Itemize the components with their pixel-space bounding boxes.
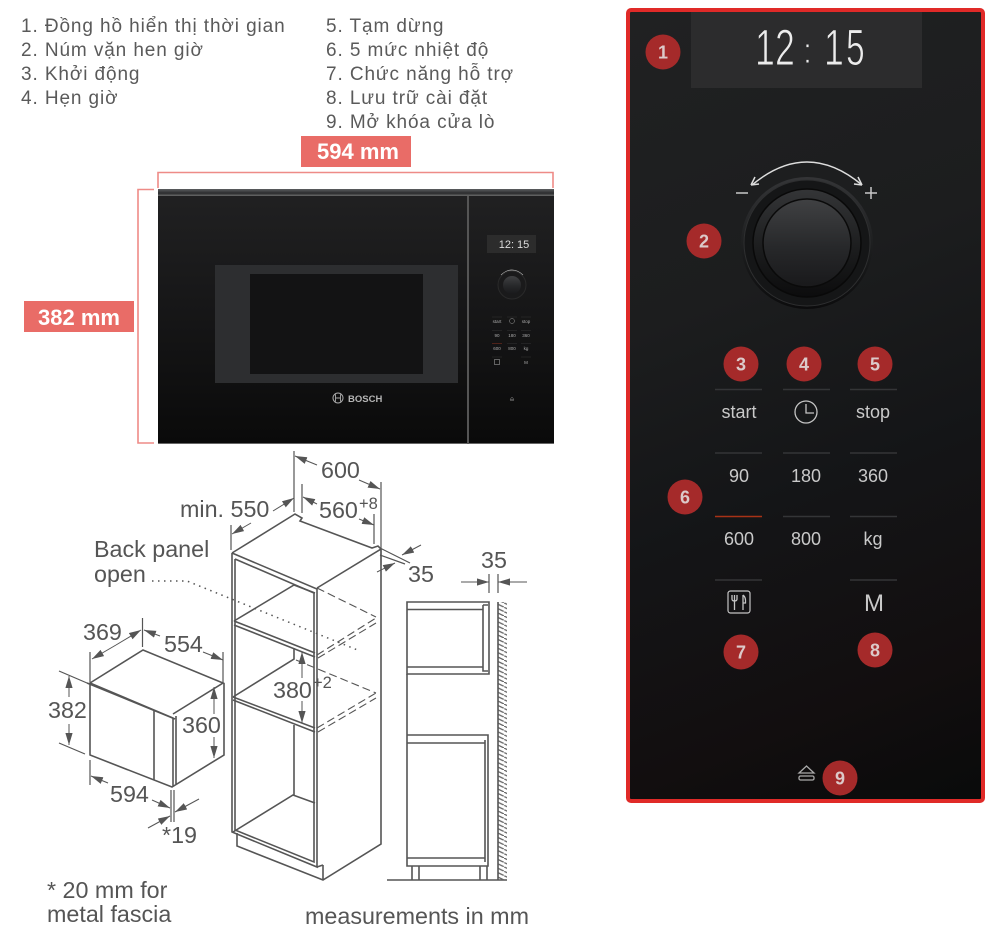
dimension 380 +2 xyxy=(273,652,332,723)
legend: functions 5 to 9: 5. Tạm dừng xyxy=(326,16,444,37)
height bracket xyxy=(138,190,154,443)
number marker 5: 5 xyxy=(870,354,880,374)
diagram: cabinet isometric xyxy=(180,451,434,880)
width bracket xyxy=(158,172,553,188)
button: 90: 90 xyxy=(729,466,749,486)
button: 180: 180 xyxy=(791,466,821,486)
small buttons: 180 xyxy=(508,333,516,338)
button: 360: 360 xyxy=(858,466,888,486)
small buttons: kg xyxy=(524,346,529,351)
number marker 9: 9 xyxy=(835,768,845,788)
lower shelf xyxy=(233,648,315,832)
label: back panel open xyxy=(94,536,360,651)
button: 600: 600 xyxy=(724,529,754,549)
dimension 594: 594 xyxy=(110,781,149,807)
panel: control panel closeup xyxy=(628,10,983,801)
microwave front photo xyxy=(158,189,554,444)
dimension 19: *19 xyxy=(162,822,197,848)
dimension 560 +8 xyxy=(302,484,378,544)
note: metal fascia: * 20 mm for xyxy=(47,877,168,903)
dimension 600 xyxy=(294,451,381,565)
button divider lines xyxy=(715,390,897,580)
small buttons: 360 xyxy=(522,333,530,338)
number marker 6 xyxy=(668,480,702,514)
dimension 380 +2: 380 xyxy=(273,677,312,703)
dimension 360: 360 xyxy=(182,712,221,738)
caption: measurements in mm: measurements in mm xyxy=(305,903,529,929)
number marker 2: 2 xyxy=(699,232,709,252)
diagram: microwave isometric xyxy=(48,618,224,848)
number marker 9 xyxy=(822,760,858,796)
small buttons: 600 xyxy=(493,346,501,351)
button: kg: kg xyxy=(863,529,883,549)
lower unit xyxy=(407,674,488,866)
small display: 12: 15 xyxy=(499,239,529,251)
door window frame xyxy=(215,265,458,383)
wall hatching xyxy=(498,602,507,880)
legend: functions 1 to 4 xyxy=(21,16,286,109)
legend: functions 5 to 9 xyxy=(326,16,514,133)
small buttons xyxy=(492,317,531,400)
number marker 7 xyxy=(724,634,758,670)
legend: functions 1 to 4: 4. Hẹn giờ xyxy=(21,88,119,109)
knob with rotation arrow xyxy=(736,162,877,309)
dimension 35 depth xyxy=(377,545,434,587)
dimension 554 xyxy=(144,630,223,683)
dimension min. 550: min. 550 xyxy=(180,496,269,522)
display: clock: 1 xyxy=(755,20,775,77)
number marker 3 xyxy=(724,346,758,382)
small buttons: start xyxy=(493,319,502,324)
legend: functions 1 to 4: 3. Khởi động xyxy=(21,64,140,85)
dimension 382 xyxy=(48,671,87,754)
legend: functions 5 to 9: 9. Mở khóa cửa lò xyxy=(326,112,495,133)
label: back panel open: Back panel xyxy=(94,536,209,562)
dimension 600: 600 xyxy=(321,457,360,483)
dimension 369 xyxy=(83,618,142,683)
button: M memory: M xyxy=(864,590,884,617)
dimension 35 wall gap: 35 xyxy=(481,547,507,573)
legend: functions 1 to 4: 1. Đồng hồ hiển thị thời gian xyxy=(21,16,286,37)
small buttons: 90 xyxy=(494,333,500,338)
number marker 5 xyxy=(858,346,892,382)
number marker 7: 7 xyxy=(736,642,746,662)
legend: functions 5 to 9: 7. Chức năng hỗ trợ xyxy=(326,63,514,85)
dimension 360 xyxy=(182,687,221,758)
icon: cutlery xyxy=(728,591,750,613)
legend: functions 5 to 9: 8. Lưu trữ cài đặt xyxy=(326,88,488,109)
small buttons: stop xyxy=(522,319,531,324)
button: 800: 800 xyxy=(791,529,821,549)
Bosch logo xyxy=(333,393,382,405)
dimension 380 +2: +2 xyxy=(313,674,332,692)
dimension 560 +8: 560 xyxy=(319,497,358,523)
dimension 382: 382 xyxy=(48,697,87,723)
upper shelf xyxy=(234,585,315,657)
display: clock: 1 xyxy=(824,20,844,77)
display: clock: 2 xyxy=(775,20,795,77)
label: back panel open: open xyxy=(94,561,146,587)
number marker 1 xyxy=(646,34,680,70)
display: clock: 5 xyxy=(846,20,865,77)
note: metal fascia xyxy=(47,877,171,927)
note: metal fascia: metal fascia xyxy=(47,901,171,927)
dimension 35 depth: 35 xyxy=(408,561,434,587)
legs and floor xyxy=(387,866,507,880)
width badge: 594 mm xyxy=(301,136,411,167)
dimension 19 xyxy=(148,790,199,848)
dimension 560 +8: +8 xyxy=(359,495,378,513)
number marker 2 xyxy=(686,224,722,258)
dimension 554: 554 xyxy=(164,631,203,657)
microwave body xyxy=(87,650,224,787)
number marker 8: 8 xyxy=(870,640,880,660)
number marker 8 xyxy=(858,632,892,668)
number marker 4: 4 xyxy=(799,354,809,374)
door window xyxy=(250,274,423,374)
number marker 6: 6 xyxy=(680,488,690,508)
dimension min. 550 xyxy=(180,496,294,550)
small display xyxy=(487,235,536,253)
height badge: 382 mm: 382 mm xyxy=(38,305,120,330)
icon: door release xyxy=(799,766,814,780)
dimension 35 wall gap xyxy=(461,547,527,593)
number marker 1: 1 xyxy=(658,42,668,62)
small buttons: M xyxy=(524,360,528,365)
number marker 4 xyxy=(786,346,822,382)
legend: functions 1 to 4: 2. Núm vặn hen giờ xyxy=(21,40,204,61)
small buttons: 800 xyxy=(508,346,516,351)
height badge: 382 mm xyxy=(24,301,134,332)
diagram: side section view xyxy=(387,547,527,880)
cabinet frame xyxy=(232,514,381,867)
width badge: 594 mm: 594 mm xyxy=(317,139,399,164)
dimension 369: 369 xyxy=(83,619,122,645)
display: clock: : xyxy=(803,31,812,71)
dimension 594 xyxy=(90,760,170,808)
upper unit xyxy=(407,602,489,674)
button: start: start xyxy=(721,402,757,422)
icon: clock xyxy=(795,401,817,423)
button: stop: stop xyxy=(856,402,890,422)
legend: functions 5 to 9: 6. 5 mức nhiệt độ xyxy=(326,40,489,61)
display: clock xyxy=(691,12,922,88)
small knob xyxy=(498,270,526,299)
number marker 3: 3 xyxy=(736,354,746,374)
Bosch logo: BOSCH xyxy=(348,394,382,405)
